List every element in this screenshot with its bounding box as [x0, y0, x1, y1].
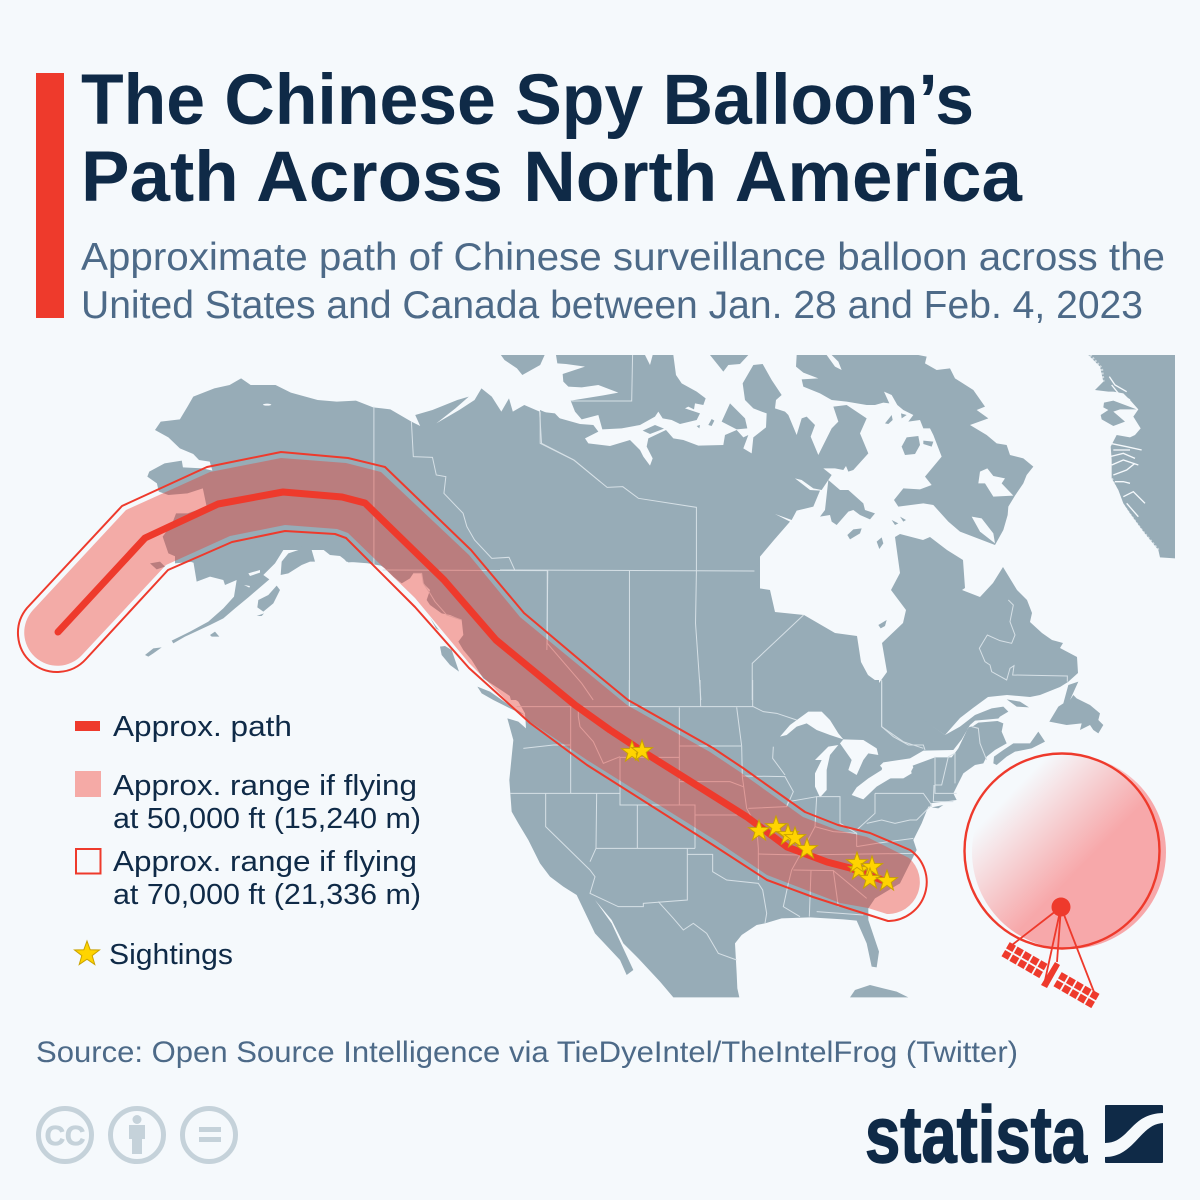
- title: [81, 61, 1023, 217]
- range band at 50,000 ft: [24, 458, 920, 914]
- legend: 50,000 ft range: at 50,000 ft (15,240 m): [113, 803, 421, 835]
- logo mark: [1105, 1105, 1164, 1163]
- borders: Quebec and Labrador: [882, 600, 1067, 802]
- balloon payload rigging: [1012, 907, 1094, 992]
- land: Ontario and Quebec: [570, 534, 1078, 735]
- title: The Chinese Spy Balloon’s: [81, 61, 974, 140]
- balloon shading: [972, 755, 1166, 949]
- accent bar: [36, 73, 64, 318]
- subtitle: Approximate path of Chinese surveillance balloon across the: [81, 236, 1165, 279]
- land: Baffin Island and Hudson Strait islands: [796, 355, 1033, 549]
- land: Atlantic Canada islands: [878, 620, 1103, 808]
- legend: path: Approx. path: [113, 711, 292, 743]
- subtitle: [81, 236, 1165, 327]
- illustration: balloon: [964, 754, 1166, 1008]
- statista logo: [865, 1090, 1164, 1179]
- logo wordmark: statista: [865, 1090, 1087, 1179]
- borders: Canadian provinces: [500, 355, 804, 700]
- left solar panel: [1001, 942, 1048, 978]
- right solar panel: [1053, 972, 1100, 1008]
- legend: 70,000 ft range: [76, 846, 421, 911]
- balloon flight path: [58, 492, 887, 882]
- balloon payload hub: [1052, 898, 1070, 916]
- payload mast: [1041, 962, 1060, 988]
- licence icons: [38, 1108, 236, 1162]
- icon: no derivatives: [182, 1108, 236, 1162]
- land: Banks Island: [501, 355, 545, 375]
- subtitle: United States and Canada between Jan. 28 and Feb. 4, 2023: [81, 284, 1143, 327]
- borders: Alaska and Yukon: [374, 407, 600, 700]
- land: Canadian Arctic coast and islands: [540, 355, 868, 600]
- land: south Alaska, Alaska Peninsula and Kodiak: [145, 520, 360, 657]
- legend: 70,000 ft range: Approx. range if flying: [113, 846, 417, 878]
- land: Alaska and western Canada: [147, 378, 574, 700]
- legend: 50,000 ft range: [75, 770, 421, 835]
- source: Source: Open Source Intelligence via TieDyeIntel/TheIntelFrog (Twitter): [36, 1036, 1018, 1069]
- icon: creative commons: [38, 1108, 92, 1162]
- map of North America: [145, 355, 1175, 997]
- land: Greenland: [1088, 355, 1175, 558]
- legend: [74, 711, 421, 971]
- legend: 50,000 ft range: Approx. range if flying: [113, 770, 417, 802]
- legend: sightings: Sightings: [109, 939, 233, 971]
- water: Great Lakes: [780, 712, 913, 799]
- land: British Columbia coast: [380, 553, 547, 728]
- water: St. Lawrence River: [880, 718, 1002, 778]
- land: United States and Mexico: [507, 680, 1008, 997]
- range outline at 70,000 ft: [18, 452, 927, 921]
- sighting stars: [622, 740, 898, 890]
- icon: creative commons: CC: [45, 1120, 85, 1151]
- borders: United States: [510, 680, 957, 960]
- icon: attribution: [110, 1108, 164, 1162]
- balloon outline: [964, 754, 1160, 948]
- title: Path Across North America: [81, 138, 1023, 217]
- borders: British Columbia fjord coast: [413, 573, 462, 620]
- legend: 70,000 ft range: at 70,000 ft (21,336 m): [113, 879, 421, 911]
